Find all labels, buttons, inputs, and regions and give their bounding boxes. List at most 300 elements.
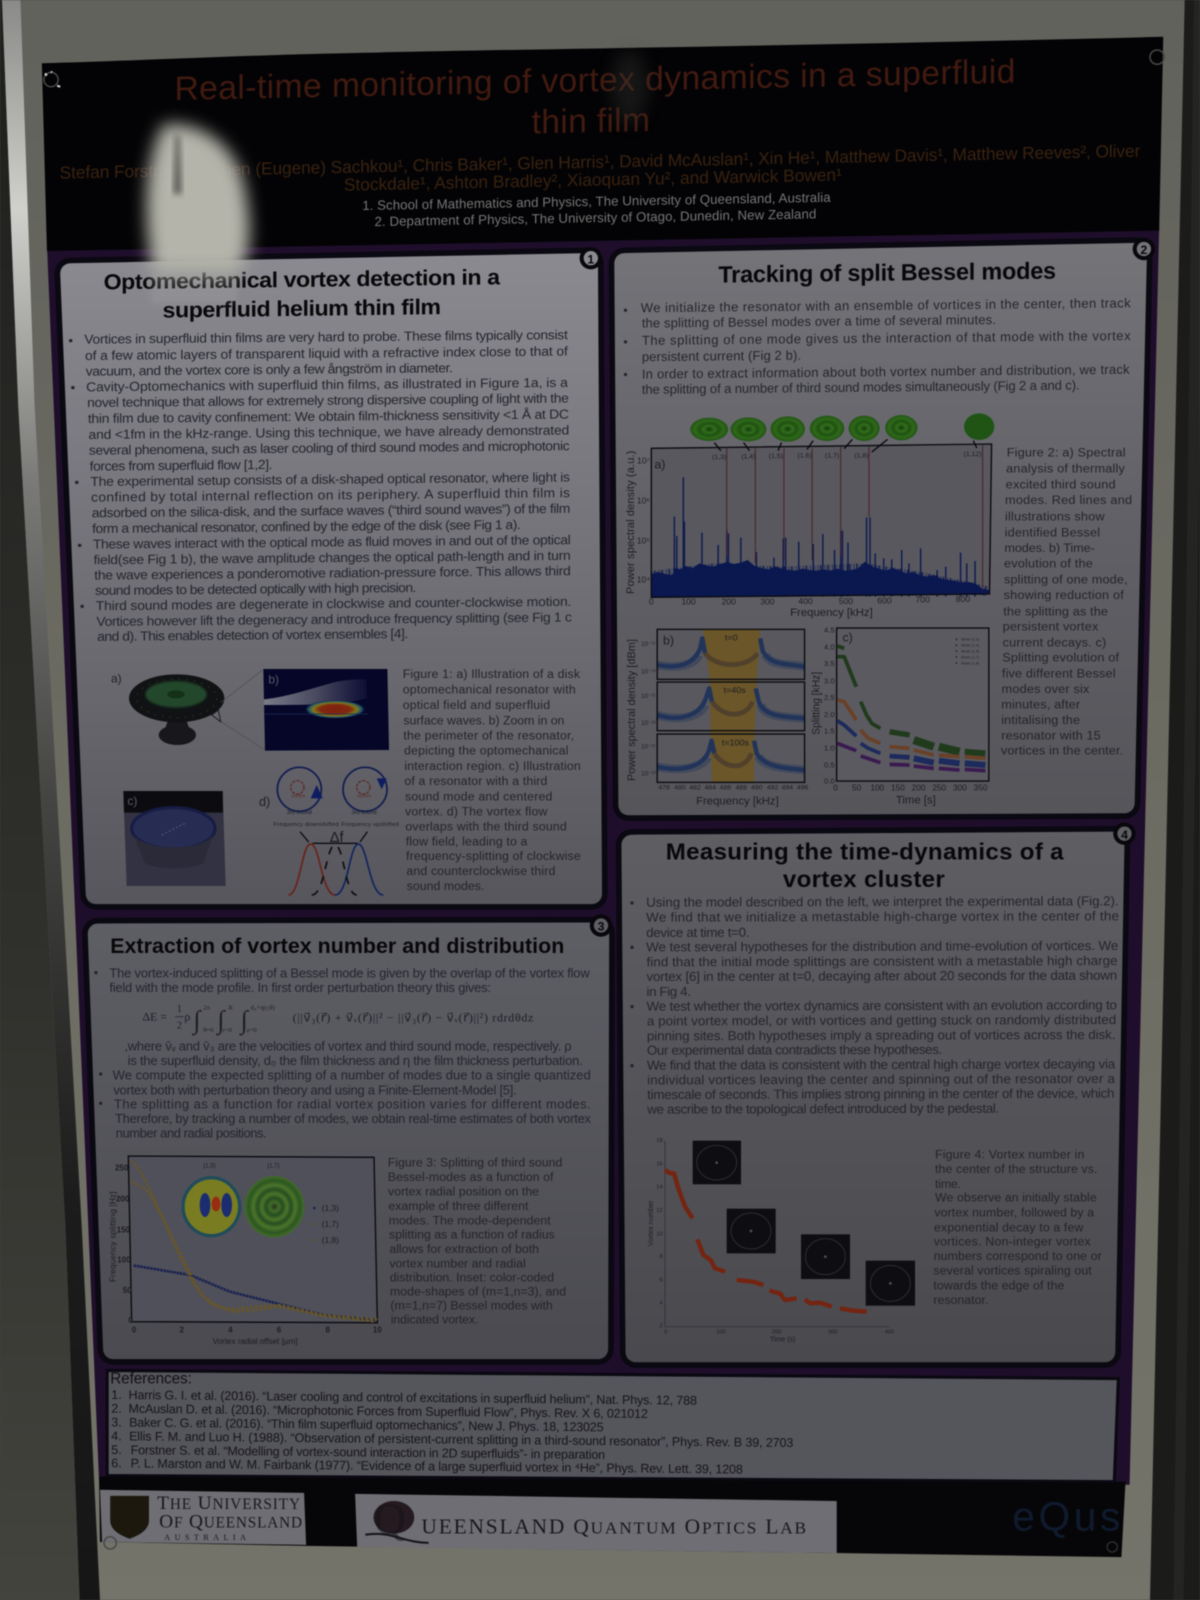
body text 1: Vortices in superfluid thin films are very hard to probe. These films typically consist [84, 328, 568, 347]
figure 1 caption: of a resonator with a third [404, 774, 548, 788]
body text 1: field(see Fig 1 b), the wave amplitude changes the optical path-length and in turn [94, 548, 571, 567]
figure 3 caption: modes. The mode-dependent [389, 1213, 551, 1227]
figure 3 legend: (1,7) [322, 1219, 339, 1229]
body text 4: individual vortices leaving the center and spinning out of the resonator over a [647, 1071, 1116, 1087]
figure 1a disk resonator: a) [111, 672, 122, 686]
figure 3 caption: mode-shapes of (m=1,n=3), and [390, 1285, 566, 1299]
affiliations: 1. School of Mathematics and Physics, The University of Queensland, Australia [362, 190, 831, 213]
body text 1: confined by total internal reflection on its periphery. A superfluid thin film is [91, 486, 570, 505]
body text 4: device at time t=0. [646, 925, 749, 940]
figure 4 caption: Figure 4: Vortex number in [935, 1147, 1085, 1161]
body text 1: and <1fm in the kHz-range. Using this technique, we have already demonstrated [89, 423, 569, 442]
Bessel mode illustrations [690, 413, 994, 442]
figure 1d frequency splitting diagram [259, 767, 399, 895]
badge 4 [1113, 822, 1136, 845]
figure 2a spectrum: 800 [956, 594, 970, 604]
panel 1: optomechanical vortex detection [69, 247, 602, 895]
figure 2 caption: intitalising the [1001, 713, 1080, 727]
figure 2a spectrum: 200 [722, 597, 736, 607]
body text 2: The splitting of one mode gives us the interaction of that mode with the vortex [642, 328, 1131, 348]
badge 1: 1 [587, 252, 594, 266]
figure 2c splitting evolution: 250 [932, 783, 947, 792]
figure 1 caption: flow field, leading to a [406, 834, 528, 848]
figure 1b zoom on perimeter [263, 669, 389, 751]
figure 3 chart: 150 [117, 1225, 131, 1234]
figure 3 chart: Vortex radial offset [µm] [213, 1336, 298, 1346]
figure 2a spectrum: 10⁶ [637, 495, 650, 505]
figure 1 caption: depicting the optomechanical [404, 744, 568, 758]
figure 2c splitting evolution: 350 [974, 783, 988, 792]
figure 2a spectrum: 700 [916, 595, 930, 605]
bullets 2 [624, 309, 627, 376]
body text 3: ,where v̄ᵥ and v̄₃ are the velocities of vortex and third sound mode, respectively. ρ [124, 1038, 572, 1053]
figure 1d frequency splitting diagram: d) [259, 795, 270, 809]
figure 2c splitting evolution: Mode (1,4) [961, 644, 979, 648]
panel 2: tracking of split Bessel modes [624, 238, 1155, 808]
figure 3 caption: indicated vortex. [391, 1313, 478, 1327]
energy equation: R [228, 1004, 233, 1011]
badge 3: 3 [598, 920, 605, 934]
figure 1 caption: Figure 1: a) Illustration of a disk [403, 667, 581, 681]
figure 2b split peaks: 486 [720, 784, 731, 791]
figure 2a spectrum: 0 [649, 597, 654, 607]
body text 1: Third sound modes are degenerate in clockwise and counter-clockwise motion. [96, 594, 571, 613]
figure 2c splitting evolution: Splitting [kHz] [810, 672, 822, 735]
figure 2c splitting evolution: 150 [891, 783, 905, 792]
figure 2c splitting evolution [810, 626, 989, 807]
body text 4: Our experimental data contradicts these hypotheses. [647, 1042, 942, 1058]
figure 2 caption: analysis of thermally [1006, 462, 1126, 475]
figure 2a spectrum: 10⁴ [637, 575, 650, 585]
figure 4 caption: several vortices spiraling out [933, 1264, 1092, 1278]
body text 1: of a few atomic layers of transparent liquid with a refractive index close to that of [85, 344, 568, 363]
figure 2a spectrum: (1,5) [769, 453, 783, 460]
vortex number chart: 8 [660, 1254, 663, 1260]
heading 3: Extraction of vortex number and distribution [110, 934, 564, 958]
body text 1: the wave experiences a ponderomotive radiation-pressure force. This allows third [94, 564, 571, 583]
references heading: References: [110, 1371, 192, 1388]
figure 2a spectrum [625, 439, 992, 619]
body text 3: vortex both with perturbation theory and using a Finite-Element-Model [5]. [113, 1082, 517, 1097]
figure 3 caption: vortex number and radial [389, 1256, 526, 1270]
logo: EQUS: eQus [1012, 1494, 1120, 1540]
figure 3 legend: (1,3) [322, 1203, 339, 1213]
body text 2: the splitting of Bessel modes over a time of several minutes. [642, 312, 996, 331]
figure 2b split peaks: Power spectral density [dBm] [626, 639, 638, 781]
heading 2: Tracking of split Bessel modes [718, 258, 1056, 288]
figure 2 [625, 413, 1132, 808]
figure 2b split peaks: 492 [767, 784, 779, 791]
heading 4 [666, 840, 1064, 893]
title: Real-time monitoring of vortex dynamics in a superfluid [174, 54, 1015, 108]
body text 1: vacuum, and the vortex core is only a few ångström in diameter. [86, 361, 453, 379]
body text 1: These waves interact with the optical mode as fluid moves in and out of the optical [93, 533, 571, 552]
vortex number chart: Vortex number [648, 1200, 655, 1246]
body text 4: We find that we initialize a metastable high-charge vortex in the center of the [646, 908, 1119, 925]
body text 1: thin film due to cavity confinement: We obtain film-thickness sensitivity <1 Å at DC [88, 407, 569, 426]
figure 2a spectrum: (1,7) [825, 452, 839, 459]
vortex number chart: 16 [656, 1161, 663, 1167]
vortex number chart: Time (s) [770, 1336, 795, 1343]
body text 4: We test whether the vortex dynamics are consistent with an evolution according to [647, 998, 1117, 1014]
figure 3 caption: distribution. Inset: color-coded [390, 1270, 554, 1284]
figure 3 chart: 2 [179, 1325, 184, 1334]
figure 2c splitting evolution: Time [s] [896, 795, 936, 807]
references list: Forstner S. et al. “Modelling of vortex-sound interaction in 2D superfluids”- in preparation [131, 1443, 605, 1462]
footer black band [99, 1477, 1126, 1557]
authors: Stockdale¹, Ashton Bradley², Xiaoquan Yu², and Warwick Bowen¹ [344, 165, 842, 195]
figure 2b split peaks: t=40s [724, 685, 746, 695]
figure 2 caption: minutes, after [1001, 698, 1080, 712]
logo: University of Queensland: AUSTRALIA [164, 1533, 246, 1542]
figure 2c splitting evolution: 0 [833, 783, 838, 792]
figure 1 caption: interaction region. c) Illustration [404, 759, 581, 773]
body text 4: in Fig 4. [647, 984, 691, 999]
figure 2 caption: illustrations show [1005, 510, 1105, 523]
figure 1 caption: optical field and superfluid [403, 698, 550, 712]
body text 3: is the superfluid density, d₀ the film thickness and η the film thickness perturbation. [128, 1053, 583, 1068]
body text 1: adsorbed on the silica-disk, and the surface waves (“third sound waves”) of the film [92, 501, 570, 520]
figure 2 caption: Figure 2: a) Spectral [1007, 446, 1126, 459]
affiliations: 2. Department of Physics, The University of Otago, Dunedin, New Zealand [374, 206, 816, 229]
figure 1d frequency splitting diagram: vortex [357, 794, 371, 800]
figure 2a spectrum: (1,4) [741, 453, 756, 460]
figure 1 caption: optomechanical resonator with [403, 682, 576, 696]
figure 2b split peaks: 494 [782, 784, 793, 791]
energy equation [142, 1004, 533, 1035]
figure 2b split peaks: 10⁻¹¹ [641, 744, 655, 751]
figure 2b split peaks: 496 [797, 784, 808, 791]
badge 2 [1133, 238, 1155, 260]
vortex number chart: 6 [660, 1277, 663, 1283]
title [174, 54, 1015, 149]
figure 2c splitting evolution: Mode (1,7) [961, 655, 979, 659]
energy equation: ΔE = [142, 1010, 167, 1024]
figure 3 chart: 50 [123, 1286, 132, 1295]
figure 2c splitting evolution: 2.5 [824, 693, 835, 702]
figure 2 caption: showing reduction of [1004, 588, 1124, 602]
body text 1: Cavity-Optomechanics with superfluid thin films, as illustrated in Figure 1a, is a [86, 375, 568, 394]
figure 2 caption: identified Bessel [1005, 526, 1100, 539]
energy equation: ρ [184, 1010, 190, 1024]
figure 2 caption: modes. Red lines and [1005, 493, 1132, 507]
heading 1: superfluid helium thin film [163, 295, 441, 322]
figure 2b split peaks: 478 [658, 784, 670, 791]
vortex number chart: 100 [716, 1329, 726, 1335]
figure 2c splitting evolution: Mode (1,3) [961, 638, 979, 642]
figure 3 caption: splitting as a function of radius [389, 1228, 555, 1242]
figure 3 legend [313, 1203, 339, 1245]
figure 2a spectrum: 400 [798, 596, 813, 606]
figure 3 caption [388, 1156, 566, 1327]
references list: Ellis F. M. and Luo H. (1988). “Observation of persistent-current splitting in a third-sound resonator”, Phys. Rev. B 39, 2703 [129, 1429, 793, 1450]
figure 2 caption: Splitting evolution of [1002, 651, 1120, 665]
figure 2 caption: splitting of one mode, [1004, 573, 1128, 586]
energy equation: z=0 [247, 1027, 257, 1034]
figure 2c splitting evolution: Mode (1,8) [961, 661, 979, 665]
body text 2: the splitting of a number of third sound modes simultaneously (Fig 2 a and c). [642, 378, 1080, 397]
vortex snapshot images [693, 1141, 915, 1306]
figure 1 caption: frequency-splitting of clockwise [406, 849, 581, 863]
shield crest [110, 1496, 149, 1539]
figure 3 chart: 4 [228, 1325, 233, 1334]
figure 2b split peaks: Frequency [kHz] [696, 796, 779, 808]
figure 1 [111, 667, 581, 895]
body text 1: sound modes to be detected optically with high precision. [95, 580, 416, 598]
figure 1d frequency splitting diagram: Frequency upshifted [341, 822, 399, 828]
poster purple background [47, 227, 1159, 1485]
body text 3: Therefore, by tracking a number of modes, we obtain real-time estimates of both vortex [115, 1111, 592, 1126]
energy equation: ∫ [239, 1005, 250, 1035]
figure 4 caption: vortices. Non-integer vortex [934, 1235, 1092, 1249]
references list: 4. [111, 1429, 122, 1443]
figure 2c splitting evolution: 4.0 [824, 642, 835, 651]
figure 3 chart: Frequency splitting [Hz] [107, 1191, 117, 1282]
vortex number chart: 18 [656, 1138, 663, 1144]
figure 2 caption: evolution of the [1004, 557, 1093, 571]
figure 3 chart: 0 [132, 1325, 137, 1334]
figure 1d frequency splitting diagram: 3rd sound [351, 810, 377, 816]
figure 2c splitting evolution: 2.0 [824, 710, 835, 719]
figure 2b split peaks: 484 [704, 784, 716, 791]
energy equation: 1 [177, 1004, 182, 1015]
logo: Queensland Quantum Optics Lab [355, 1494, 837, 1553]
body text 4: We find that the data is consistent with the central high charge vortex decaying via [647, 1057, 1116, 1073]
vortex number chart: 10 [656, 1231, 663, 1237]
references list: 2. [111, 1402, 122, 1416]
references list: 1. [111, 1388, 122, 1402]
figure 3 caption: (m=1,n=7) Bessel modes with [390, 1299, 553, 1313]
figure 1c resonator with vortex: c) [127, 794, 137, 808]
body text 3: We compute the expected splitting of a number of modes due to a single quantized [113, 1068, 591, 1083]
figure 1 caption: sound mode and centered [405, 789, 553, 803]
body text 4: find that the initial mode splittings are consistent with a metastable high charge [647, 953, 1118, 969]
figure 4 [648, 1138, 1102, 1343]
figure 2c splitting evolution: 50 [852, 783, 862, 792]
panel 4: measuring time dynamics [630, 822, 1136, 1352]
figure 1 caption: overlaps with the third sound [405, 819, 567, 833]
figure 2a spectrum: a) [654, 458, 665, 472]
vortex number chart: 12 [656, 1208, 663, 1214]
body text 2 [641, 295, 1131, 397]
logo: University of Queensland: THE UNIVERSITY [157, 1493, 300, 1514]
figure 2 caption: modes. b) Time- [1004, 541, 1095, 555]
badge 4: 4 [1121, 828, 1128, 842]
body text 4: We test several hypotheses for the distribution and time-evolution of vortices. We [646, 938, 1118, 954]
body text 1 [84, 328, 572, 644]
figure 2c splitting evolution: 200 [912, 783, 926, 792]
figure 1 caption: surface waves. b) Zoom in on [403, 713, 565, 727]
energy equation: θ=0 [203, 1027, 214, 1034]
lab emblem [373, 1501, 414, 1534]
vortex number chart [648, 1138, 894, 1343]
body text 2: We initialize the resonator with an ensemble of vortices in the center, then track [641, 295, 1131, 315]
references list: McAuslan D. et al. (2016). “Microphotonic Forces from Superfluid Flow”, Phys. Rev. X 6, 021012 [129, 1402, 648, 1421]
figure 2 caption: five different Bessel [1002, 667, 1116, 680]
figure 2b split peaks: 10⁻¹¹ [641, 641, 655, 648]
figure 2c splitting evolution: Mode (1,5) [961, 649, 979, 653]
figure 2b split peaks: 10⁻¹³ [641, 668, 655, 675]
figure 3 chart: 250 [115, 1164, 129, 1173]
figure 3 chart: 6 [277, 1325, 282, 1334]
panel 3: extraction of vortex number [94, 914, 612, 1349]
figure 2b split peaks: 10⁻¹³ [641, 720, 655, 727]
inset mode shapes: (1,3) [203, 1163, 216, 1169]
heading 4: vortex cluster [783, 867, 945, 893]
figure 2c splitting evolution: 3.0 [824, 676, 835, 685]
figure 3 caption: Figure 3: Splitting of third sound [388, 1156, 563, 1170]
figure 1 caption: sound modes. [407, 879, 484, 893]
figure 4 caption: the center of the structure vs. [935, 1162, 1097, 1176]
figure 2a spectrum: 10⁷ [637, 455, 650, 465]
figure 2b split peaks: 10⁻¹¹ [641, 693, 655, 700]
figure 3 chart: 100 [117, 1255, 131, 1264]
figure 2b split peaks [626, 629, 808, 808]
figure 2a spectrum: (1,8) [854, 452, 868, 459]
figure 2b split peaks: 490 [751, 784, 763, 791]
figure 3 legend: (1,8) [322, 1235, 339, 1245]
figure 2c splitting evolution: c) [842, 631, 853, 644]
body text 4: pinning sites. Both hypotheses imply a spreading out of vortices across the disk. [647, 1027, 1116, 1043]
references list: Harris G. I. et al. (2016). “Laser cooling and control of excitations in superfluid helium”, Nat. Phys. 12, 788 [129, 1388, 697, 1408]
bullets 4 [630, 901, 634, 1067]
references list: 5. [111, 1443, 122, 1457]
body text 4 [646, 893, 1119, 1117]
figure 2a spectrum: Frequency [kHz] [790, 607, 873, 619]
body text 3: The vortex-induced splitting of a Bessel mode is given by the overlap of the vortex flow [109, 965, 590, 980]
logo: Queensland Quantum Optics Lab: Q [373, 1494, 406, 1544]
figure 3 caption: Bessel-modes as a function of [388, 1170, 554, 1184]
badge 3 [590, 914, 612, 937]
figure 2b split peaks: t=0 [725, 632, 738, 642]
figure 1c resonator with vortex [123, 791, 226, 886]
camera flash glare [147, 50, 648, 304]
body text 3: The splitting as a function for radial vortex position varies for different modes. [114, 1097, 591, 1112]
bullets 3 [94, 971, 102, 1105]
body text 4: timescale of seconds. This implies strong pinning in the center of the device, which [647, 1086, 1115, 1102]
figure 1d frequency splitting diagram: vortex [292, 794, 306, 800]
figure 1b zoom on perimeter: b) [268, 672, 279, 686]
body text 1: form a mechanical resonator, confined by the edge of the disk (see Fig 1 a). [92, 517, 521, 536]
figure 2b split peaks: 488 [735, 784, 747, 791]
figure 2c splitting evolution: 0.5 [824, 760, 835, 769]
figure 2a spectrum: (1,3) [712, 454, 726, 461]
figure 2a spectrum: 300 [760, 597, 775, 607]
body text 1: forces from superfluid flow [1,2]. [90, 457, 273, 474]
heading 1: Optomechanical vortex detection in a [104, 265, 501, 294]
figure 2 caption: current decays. c) [1003, 636, 1106, 650]
figure 1 caption: the perimeter of the resonator, [403, 729, 574, 743]
vortex number chart: 300 [828, 1329, 837, 1335]
affiliations [362, 190, 831, 229]
body text 4: vortex [6] in the center at t=0, decaying after about 20 seconds for the data shown [647, 968, 1117, 984]
references list: 3. [111, 1415, 122, 1430]
figure 2c splitting evolution: 0.0 [824, 777, 835, 786]
figure 3 chart: 10 [373, 1325, 382, 1334]
bullets 1 [69, 339, 84, 608]
figure 2 caption: excited third sound [1006, 478, 1116, 491]
body text 4: Using the model described on the left, we interpret the experimental data (Fig.2). [646, 893, 1119, 910]
references list [111, 1388, 793, 1477]
body text 4: a point vortex model, or with vortices and getting stuck on randomly distributed [647, 1012, 1116, 1028]
figure 1 caption: vortex. d) The vortex flow [405, 804, 547, 818]
figure 2 caption: vortices in the center. [1001, 744, 1123, 758]
body text 1: novel technique that allows for extremely strong dispersive coupling of light with the [87, 391, 569, 410]
logo: University of Queensland: OF QUEENSLAND [159, 1512, 302, 1533]
vortex number chart: 200 [772, 1329, 781, 1335]
energy equation: 2 [177, 1021, 182, 1032]
figure 2a spectrum: 600 [877, 595, 892, 605]
figure 4 caption: time. [935, 1177, 961, 1191]
figure 3 chart: 0 [128, 1316, 133, 1325]
figure 3 chart: 8 [325, 1325, 330, 1334]
vortex number chart: 14 [656, 1185, 663, 1191]
figure 2a spectrum: Power spectral density (a.u.) [625, 450, 637, 594]
figure 2c splitting evolution: 4.5 [824, 626, 835, 635]
figure 1d frequency splitting diagram: Frequency downshifted [273, 822, 339, 828]
figure 1d frequency splitting diagram: Δf [330, 830, 345, 846]
references panel [107, 1370, 1118, 1482]
figure 2a spectrum: (1,6) [798, 452, 812, 459]
body text 2: persistent current (Fig 2 b). [642, 348, 801, 364]
figure 2c splitting evolution: 300 [953, 783, 967, 792]
figure 1a disk resonator [111, 670, 265, 750]
figure 1 caption [403, 667, 581, 893]
vortex number chart: 400 [885, 1329, 894, 1335]
body text 3 [109, 965, 592, 1141]
body text 4: we ascribe to the topological defect introduced by the pedestal. [646, 1101, 999, 1117]
figure 2 caption: persistent vortex [1003, 620, 1099, 634]
figure 2c splitting evolution: 100 [870, 783, 885, 792]
body text 3: number and radial positions. [116, 1126, 267, 1141]
body text 2: In order to extract information about both vortex number and distribution, we track [642, 362, 1130, 382]
figure 2b split peaks: 10⁻¹³ [641, 770, 655, 777]
figure 2c splitting evolution: 3.5 [824, 659, 835, 668]
figure 2 caption: resonator with 15 [1001, 729, 1101, 742]
figure 2 caption: the splitting as the [1003, 605, 1108, 618]
figure 2a spectrum: (1,12) [964, 451, 982, 458]
figure 4 caption [933, 1147, 1102, 1307]
figure 2c splitting evolution: 1.0 [824, 743, 835, 752]
figure 3 caption: example of three different [388, 1199, 529, 1213]
figure 2 caption: modes over six [1002, 682, 1090, 696]
figure 4 caption: We observe an initially stable [935, 1191, 1097, 1205]
figure 4 caption: towards the edge of the [933, 1278, 1065, 1292]
energy equation: 2π [203, 1004, 211, 1011]
logo: University of Queensland [100, 1490, 306, 1545]
body text 1: Vortices however lift the degeneracy and introduce frequency splitting (see Fig 1 c [96, 610, 572, 629]
energy equation: r=0 [223, 1027, 233, 1034]
figure 4 caption: exponential decay to a few [934, 1220, 1083, 1234]
figure 4 caption: resonator. [933, 1293, 988, 1307]
figure 2b split peaks: 480 [674, 784, 686, 791]
figure 3 caption: allows for extraction of both [389, 1242, 539, 1256]
inset mode shapes [181, 1163, 304, 1237]
figure 3 caption: vortex radial position on the [388, 1185, 539, 1199]
figure 2b split peaks: 482 [689, 784, 701, 791]
vortex number chart: 2 [660, 1323, 663, 1329]
figure 2 caption [1001, 446, 1132, 758]
references list: 6. [111, 1456, 122, 1470]
figure 3 chart: 200 [116, 1194, 130, 1203]
badge 1 [580, 247, 602, 269]
figure 1 caption: and counterclockwise third [406, 864, 556, 878]
heading 4: Measuring the time-dynamics of a [666, 840, 1064, 866]
energy equation: (||v⃗₃(r⃗) + v⃗ᵥ(r⃗)||² − ||v⃗₃(r⃗) − v⃗ᵥ(r⃗)||²) rdrdθdz [293, 1010, 533, 1024]
body text 1: and d). This enables detection of vortex ensembles [4]. [97, 626, 408, 644]
figure 2b split peaks: b) [663, 634, 674, 648]
vortex number chart: 4 [660, 1300, 663, 1306]
